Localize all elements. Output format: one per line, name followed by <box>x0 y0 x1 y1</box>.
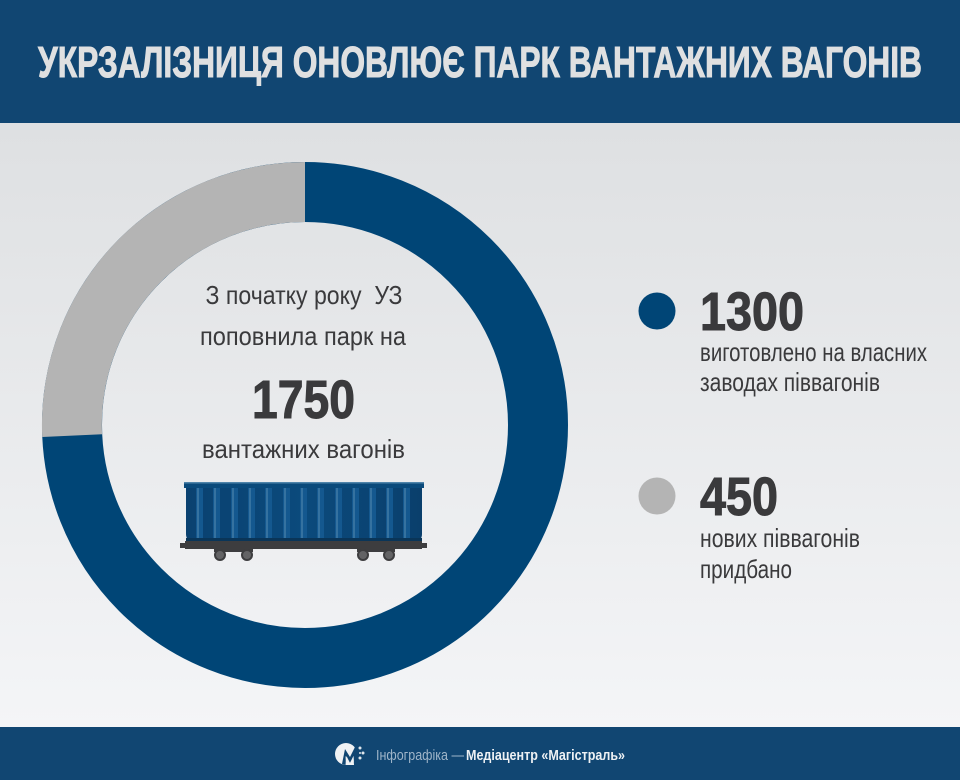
icon: freight wagon <box>180 482 427 560</box>
footer banner: Медіацентр «Магістраль» <box>466 747 625 764</box>
legend item: 1300 <box>638 282 927 397</box>
description: own plants: заводах піввагонів <box>700 367 880 397</box>
description: own plants <box>700 337 927 397</box>
footer banner <box>0 727 960 780</box>
description: purchased <box>700 523 860 584</box>
donut centre text <box>200 280 406 464</box>
donut centre text: 1750 <box>252 370 355 430</box>
donut centre text: вантажних вагонів <box>202 434 405 464</box>
legend dot: blue <box>638 292 676 330</box>
donut centre text: З початку року УЗ <box>206 280 402 310</box>
legend item: 450 <box>638 467 860 584</box>
value: 450: 450 <box>700 467 778 527</box>
legend dot: grey <box>638 478 676 514</box>
description: purchased: придбано <box>700 554 792 584</box>
donut centre text: поповнила парк на <box>200 321 406 351</box>
header banner <box>0 0 960 123</box>
value: 1300: 1300 <box>700 282 804 342</box>
description: purchased: нових піввагонів <box>700 523 860 553</box>
icon: Magistral logo <box>335 743 364 765</box>
footer credit: Інфографіка — <box>376 747 464 764</box>
donut chart <box>42 162 538 658</box>
